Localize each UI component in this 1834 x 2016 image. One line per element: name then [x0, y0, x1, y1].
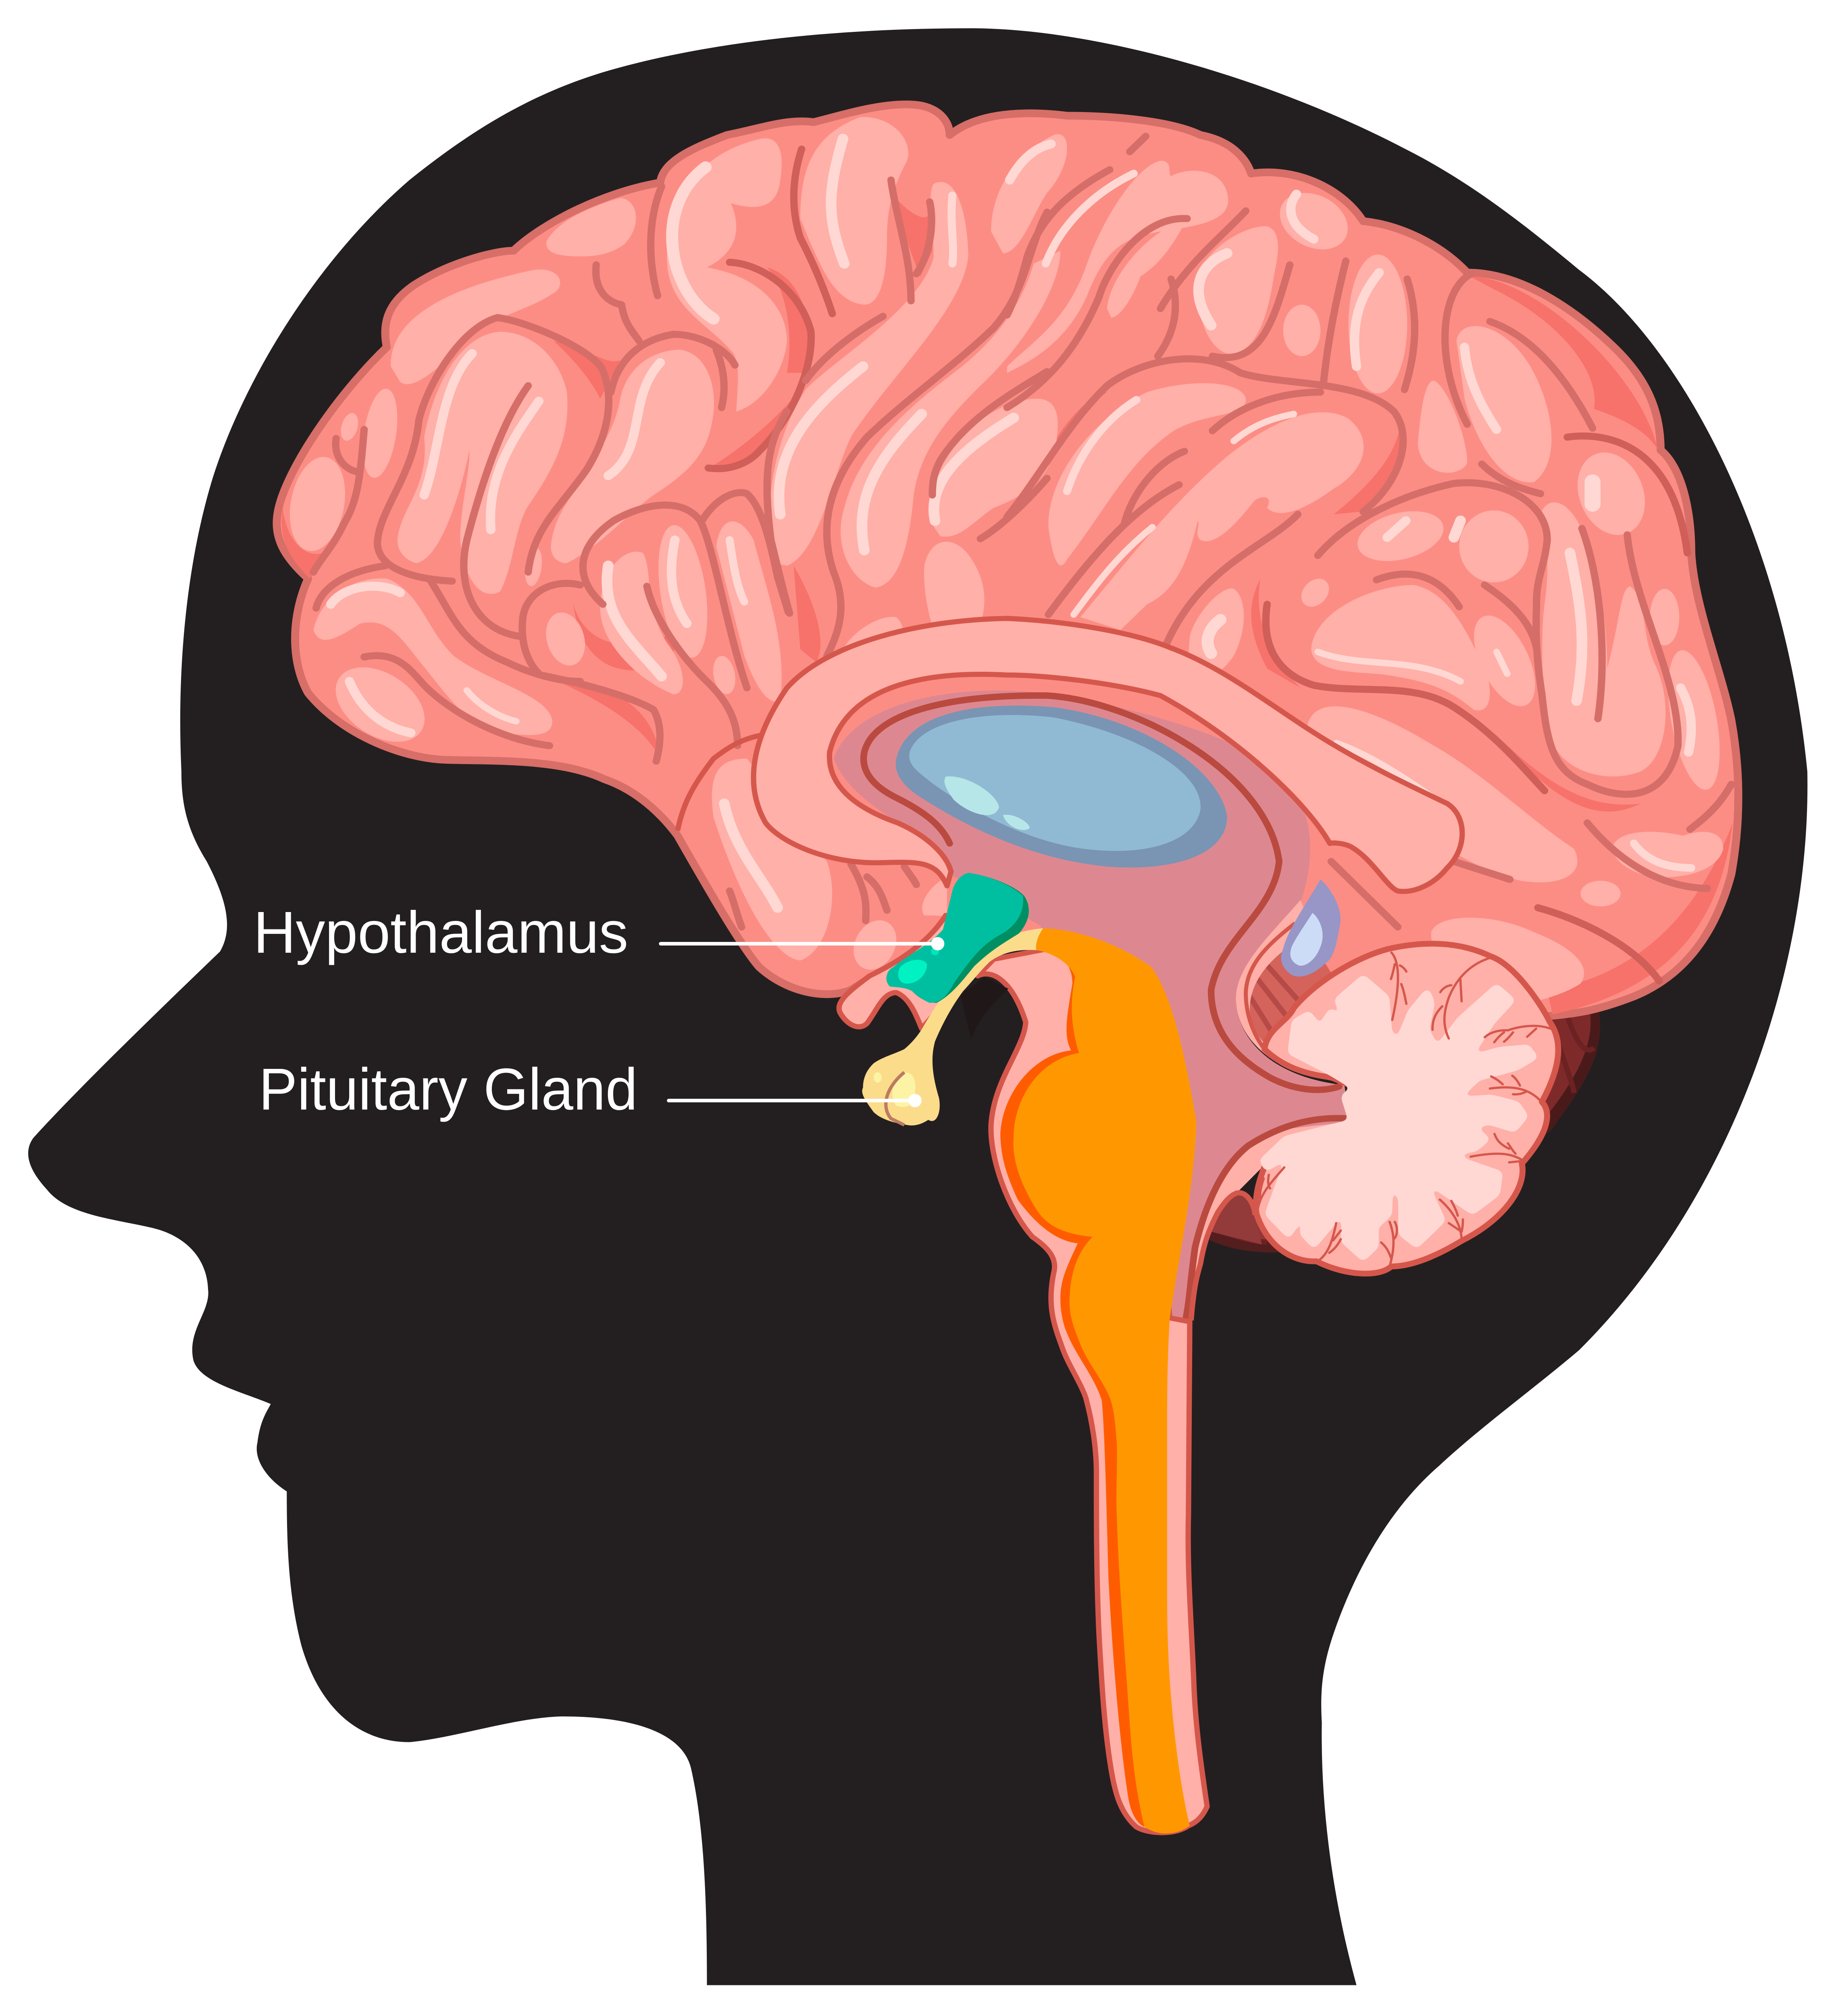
saturated shadow patches [281, 193, 1733, 1014]
hypothalamus [887, 873, 1029, 1003]
ventricle [896, 706, 1227, 867]
cerebrum base [277, 104, 1738, 1029]
label: Hypothalamus: Hypothalamus [254, 899, 628, 965]
cerebellum shadow folds [1208, 990, 1600, 1252]
brainstem orange core [1014, 928, 1197, 1833]
frontal lobe contour and tongue [678, 735, 967, 1029]
stem contour to cerebellum [1191, 1193, 1255, 1320]
brainstem and spinal cord outer sheath [978, 949, 1207, 1833]
leader line: Pituitary Gland [667, 1094, 922, 1107]
sulci lines [313, 136, 1731, 981]
pink bands beside mauve [1186, 900, 1355, 1320]
corpus callosum [754, 619, 1462, 891]
orange rim [1000, 945, 1160, 1827]
interior mauve region [834, 690, 1350, 1324]
striped region behind cerebellum [1236, 926, 1334, 1061]
label: Pituitary Gland: Pituitary Gland [259, 1056, 637, 1122]
shaded arch under stem [1211, 1193, 1262, 1245]
cerebellum white matter [1263, 979, 1534, 1258]
inner dark contours [864, 696, 1350, 1319]
leader line: Hypothalamus [659, 937, 944, 950]
drop-shaped ventricle [1246, 879, 1341, 1049]
gyri highlights [331, 139, 1691, 908]
pituitary stalk and gland [862, 928, 1043, 1125]
light gyri [283, 117, 1729, 1009]
cerebellum [1256, 944, 1558, 1274]
subtle dark shadow [960, 977, 1008, 1039]
cerebellum vessels [1257, 952, 1550, 1266]
